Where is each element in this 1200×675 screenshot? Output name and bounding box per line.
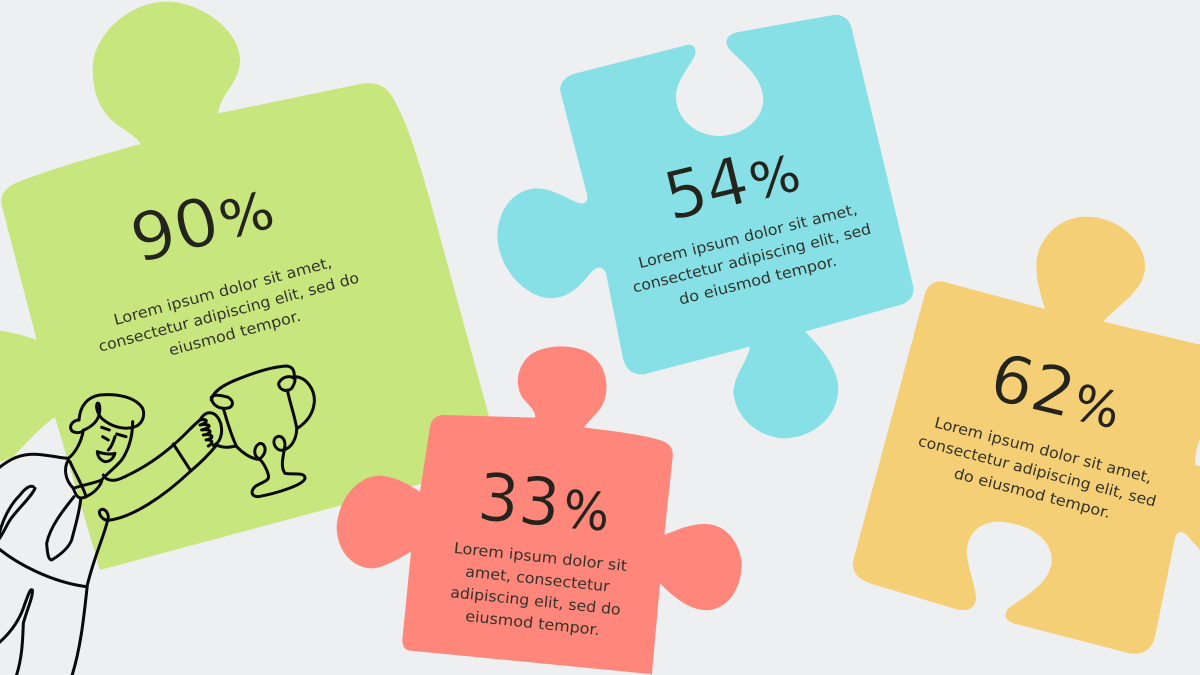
text block: yellow piece body bbox=[916, 413, 1158, 522]
body, collar and tie bbox=[0, 454, 102, 675]
raised arm and hand bbox=[72, 413, 222, 675]
text block: red piece body: eiusmod tempor. bbox=[464, 607, 601, 639]
text block: green piece body: Lorem ipsum dolor sit amet, bbox=[112, 253, 334, 329]
text block: red piece body: adipiscing elit, sed do bbox=[450, 583, 621, 619]
icon: trophy bbox=[211, 366, 314, 497]
text block: yellow piece body: consectetur adipiscing elit, sed bbox=[916, 432, 1158, 511]
puzzle shape: yellow bbox=[853, 217, 1200, 654]
illustration: line-art man holding trophy bbox=[0, 366, 314, 675]
text block: blue piece body: Lorem ipsum dolor sit amet, bbox=[636, 200, 859, 272]
panel: yellow puzzle piece 62% bbox=[853, 217, 1200, 654]
heading: 33%: % bbox=[561, 480, 612, 544]
puzzle shape: green bbox=[0, 2, 510, 570]
heading: 90%: % bbox=[213, 180, 281, 252]
heading: 33%: 33 bbox=[475, 458, 563, 542]
heading: 62%: 62 bbox=[983, 339, 1083, 433]
heading: 54%: % bbox=[744, 144, 806, 212]
head and hair bbox=[68, 395, 144, 480]
heading: 90%: 90 bbox=[122, 181, 227, 279]
panel: green puzzle piece 90% bbox=[0, 2, 510, 570]
text block: blue piece body: consectetur adipiscing elit, sed bbox=[631, 220, 873, 297]
puzzle shape: blue bbox=[497, 15, 913, 438]
panel: blue puzzle piece 54% bbox=[497, 15, 913, 438]
text block: blue piece body bbox=[631, 200, 873, 308]
text block: green piece body: consectetur adipiscing elit, sed do bbox=[96, 269, 361, 356]
text block: red piece body: Lorem ipsum dolor sit bbox=[453, 539, 628, 575]
puzzle shape: red bbox=[337, 346, 742, 675]
text block: yellow piece body: do eiusmod tempor. bbox=[952, 464, 1112, 522]
text block: red piece body: amet, consectetur bbox=[464, 562, 611, 596]
text block: yellow piece body: Lorem ipsum dolor sit amet, bbox=[933, 413, 1154, 487]
heading: 54%: 54 bbox=[657, 141, 756, 236]
text block: green piece body: eiusmod tempor. bbox=[167, 307, 303, 359]
text block: blue piece body: do eiusmod tempor. bbox=[677, 252, 839, 308]
heading: 62%: % bbox=[1068, 373, 1126, 441]
text block: red piece body bbox=[450, 539, 628, 639]
panel: red puzzle piece 33% bbox=[337, 346, 742, 675]
